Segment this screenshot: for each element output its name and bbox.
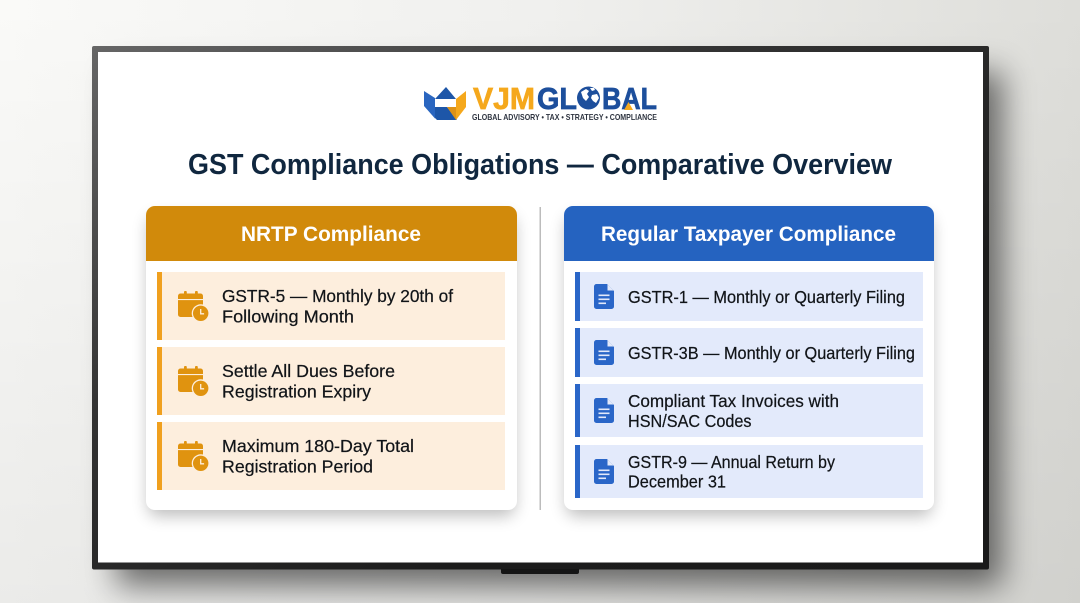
item text: GSTR-3B — Monthly or Quarterly Filing: [628, 343, 915, 363]
item text: Registration Expiry: [222, 382, 371, 402]
panel header: [564, 206, 934, 261]
television shadow: [116, 72, 1002, 586]
television frame: [92, 46, 989, 574]
item text: GSTR-1 — Monthly or Quarterly Filing: [628, 287, 905, 307]
item: tax invoices: [575, 384, 923, 437]
item: GSTR-9: [575, 445, 923, 498]
icon: document: [594, 398, 614, 423]
logo wordmark: GL: GL: [537, 82, 577, 116]
icon: document: [594, 459, 614, 484]
logo tagline: GLOBAL ADVISORY • TAX • STRATEGY • COMPLIANCE: [472, 112, 657, 122]
company logo: [424, 82, 657, 122]
panel: NRTP compliance: [146, 206, 517, 516]
item text: [628, 391, 839, 431]
panel header: [146, 206, 517, 261]
panel shadow: [566, 216, 932, 516]
icon: calendar clock: [178, 441, 210, 472]
item text: [222, 286, 453, 326]
item text: Maximum 180-Day Total: [222, 436, 414, 456]
item: settle dues: [157, 347, 505, 415]
item text: [222, 436, 414, 476]
logo wordmark: VJM: VJM: [473, 82, 535, 116]
icon: calendar clock: [178, 366, 210, 397]
divider: [540, 207, 541, 510]
screen: [98, 52, 983, 562]
item: maximum period: [157, 422, 505, 490]
item: GSTR-5: [157, 272, 505, 340]
item text: HSN/SAC Codes: [628, 411, 752, 431]
logo icon: [424, 87, 466, 120]
icon: calendar clock: [178, 291, 210, 322]
item text: [628, 452, 835, 492]
logo globe: [577, 86, 600, 110]
panel body: [564, 206, 934, 510]
icon: document: [594, 284, 614, 309]
heading: Regular Taxpayer Compliance: [601, 222, 896, 246]
heading: NRTP Compliance: [241, 222, 421, 246]
item: GSTR-1: [575, 272, 923, 321]
item text: Compliant Tax Invoices with: [628, 391, 839, 411]
panel body: [146, 206, 517, 510]
logo accent: [624, 102, 633, 110]
item text: Following Month: [222, 306, 354, 326]
item text: Settle All Dues Before: [222, 361, 395, 381]
item text: December 31: [628, 472, 726, 492]
item text: Registration Period: [222, 456, 373, 476]
item text: [222, 361, 395, 402]
item: GSTR-3B: [575, 328, 923, 377]
stand notch: [501, 569, 579, 574]
icon: document: [594, 340, 614, 365]
panel shadow: [148, 216, 515, 516]
item text: GSTR-5 — Monthly by 20th of: [222, 286, 453, 306]
panel: regular taxpayer compliance: [564, 206, 934, 516]
item text: GSTR-9 — Annual Return by: [628, 452, 835, 472]
title: GST Compliance Obligations — Comparative Overview: [188, 149, 892, 181]
logo wordmark: BAL: BAL: [602, 82, 657, 116]
